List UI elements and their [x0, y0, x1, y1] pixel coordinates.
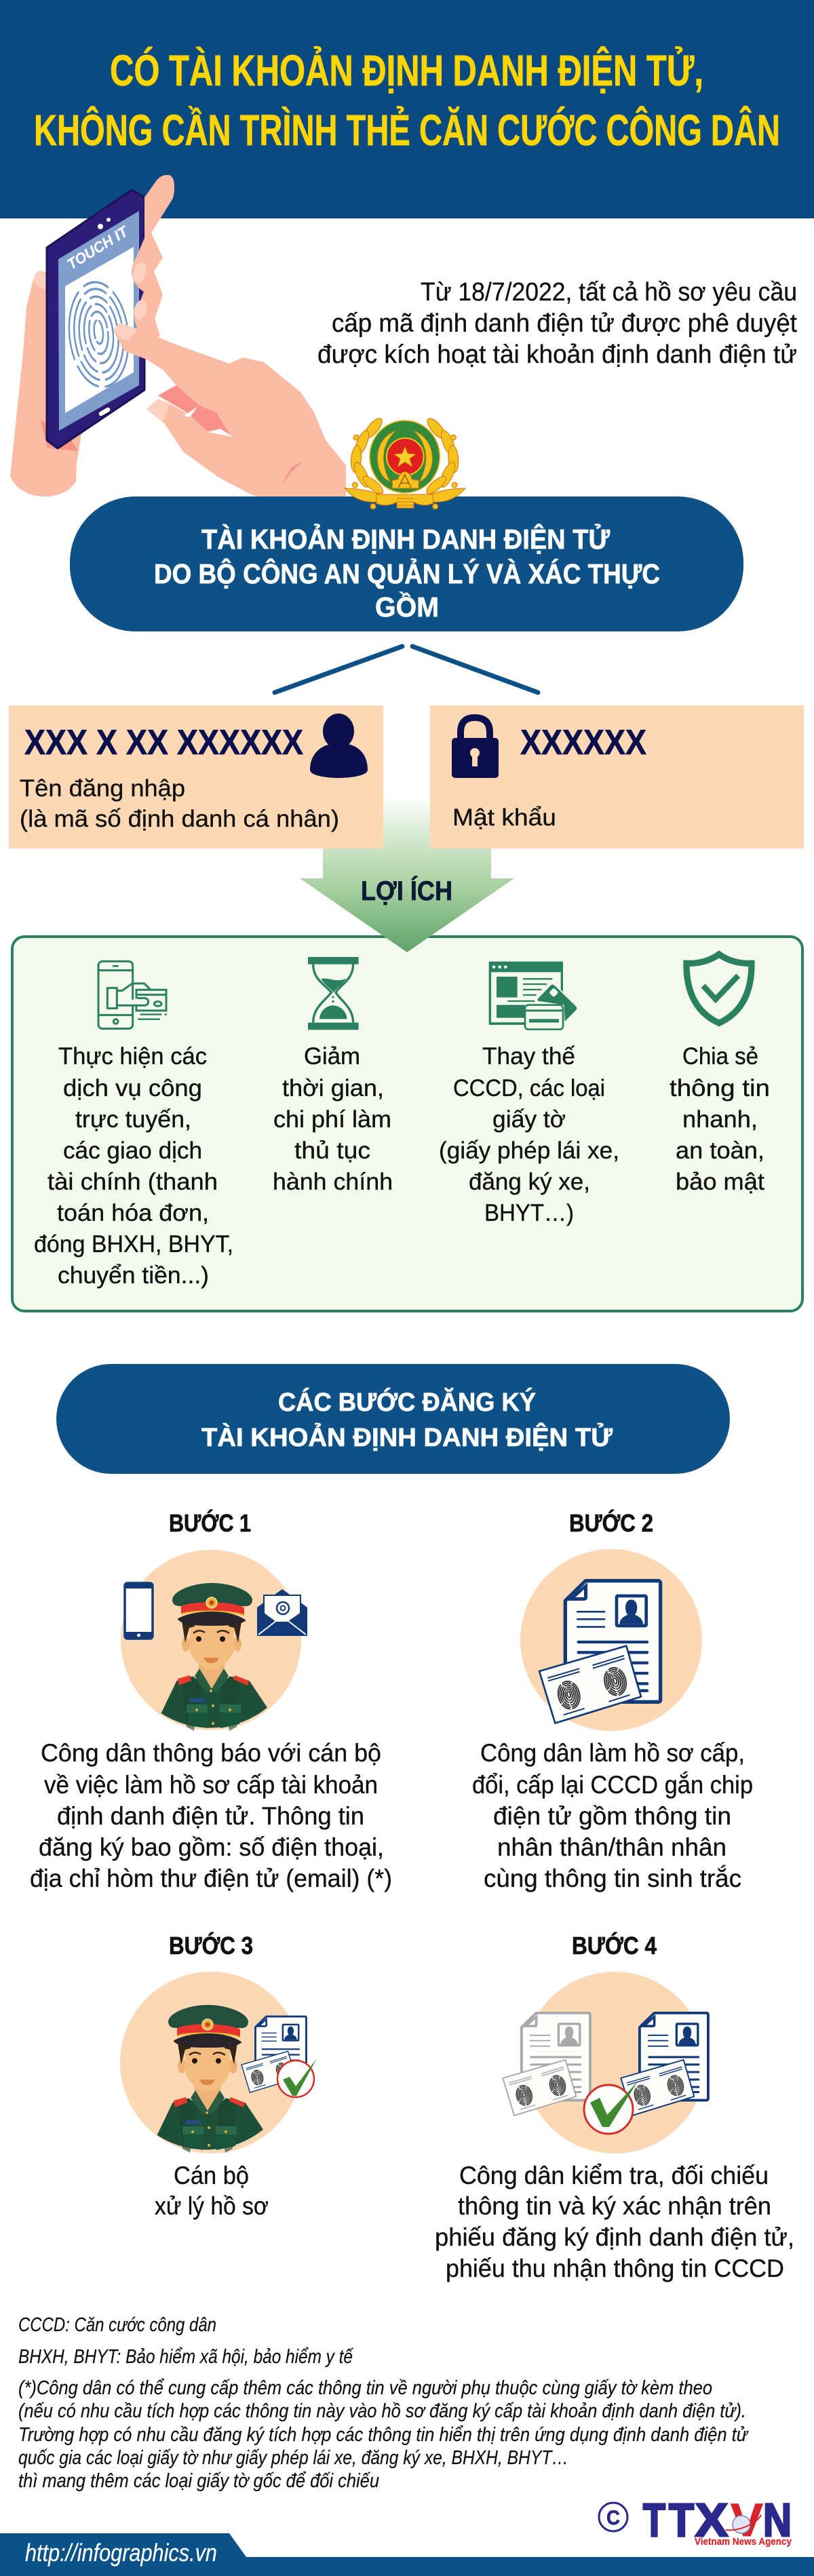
benefit 4 text: nhanh,	[682, 1106, 758, 1133]
benefit 3 text: Thay thế	[482, 1043, 575, 1070]
step 4 text: Công dân kiểm tra, đối chiếu	[459, 2162, 769, 2189]
pill: registration steps heading: CÁC BƯỚC ĐĂNG KÝ	[278, 1387, 536, 1417]
fingerprint on screen	[64, 279, 134, 390]
benefit 3 text: BHYT…)	[484, 1200, 574, 1226]
benefit 1 text: chuyển tiền...)	[58, 1262, 209, 1289]
icon: phone payment	[98, 961, 167, 1029]
illustration: profile and ID cards	[520, 1549, 702, 1731]
box: username: XXX X XX XXXXXX	[24, 723, 303, 762]
benefit 2 text: chi phí làm	[273, 1106, 391, 1133]
pointing hand	[113, 323, 346, 501]
notes: thì mang thêm các loại giấy tờ gốc để đối chiếu	[18, 2470, 379, 2492]
box: password: Mật khẩu	[452, 804, 556, 831]
step 3 text: xử lý hồ sơ	[155, 2192, 269, 2220]
notes: BHXH, BHYT: Bảo hiểm xã hội, bảo hiểm y tế	[18, 2346, 354, 2368]
notes: CCCD: Căn cước công dân	[18, 2314, 216, 2336]
logo: TTXVN: T	[643, 2494, 665, 2546]
step 3: BƯỚC 3	[169, 1931, 253, 1959]
header banner	[0, 0, 814, 218]
pill: account heading	[70, 496, 743, 631]
arrow: benefits	[300, 795, 514, 952]
pill: registration steps heading	[56, 1364, 730, 1474]
icon: police emblem	[345, 416, 465, 509]
pill: account heading: GỒM	[375, 591, 439, 623]
step 4 text	[435, 2162, 794, 2282]
benefit 4 text: bảo mật	[676, 1169, 764, 1195]
benefit 1 text: các giao dịch	[63, 1137, 202, 1164]
phone	[47, 190, 144, 448]
box: password	[430, 705, 804, 848]
benefit 4 text: thông tin	[670, 1075, 770, 1101]
benefit 1 text: đóng BHXH, BHYT,	[34, 1231, 233, 1257]
benefit 1 text: toán hóa đơn,	[57, 1200, 209, 1226]
box: password: XXXXXX	[520, 723, 646, 762]
pill: account heading: DO BỘ CÔNG AN QUẢN LÝ VÀ XÁC THỰC	[154, 558, 660, 589]
intro text	[317, 278, 797, 369]
step 1: BƯỚC 1	[169, 1508, 251, 1537]
pill: account heading: TÀI KHOẢN ĐỊNH DANH ĐIỆN TỬ	[201, 524, 610, 555]
step 1 text: địa chỉ hòm thư điện tử (email) (*)	[30, 1865, 392, 1892]
benefit 3 text: CCCD, các loại	[453, 1075, 605, 1101]
step 2 text	[472, 1739, 753, 1892]
step 2: BƯỚC 2	[569, 1508, 653, 1537]
logo: TTXVN: N	[763, 2494, 792, 2546]
footer band	[0, 2533, 814, 2576]
left holding hand	[10, 271, 81, 496]
benefit 1 text: trực tuyến,	[75, 1106, 191, 1133]
benefit 1 text: Thực hiện các	[58, 1043, 207, 1070]
logo: TTXVN: T	[669, 2494, 694, 2546]
box: username: (là mã số định danh cá nhân)	[20, 806, 339, 832]
step 1 text: Công dân thông báo với cán bộ	[41, 1739, 381, 1767]
illustration: compare documents	[503, 1972, 708, 2153]
box: username	[9, 705, 383, 848]
step 3 text	[155, 2162, 269, 2220]
step 4	[435, 1931, 794, 2282]
connector chevron	[275, 646, 538, 692]
logo: TTXVN: V	[731, 2494, 763, 2546]
step 4 text: thông tin và ký xác nhận trên	[458, 2192, 771, 2220]
step 2 text: Công dân làm hồ sơ cấp,	[480, 1739, 745, 1767]
benefit 4 text: Chia sẻ	[682, 1043, 758, 1070]
step 1 text	[30, 1739, 392, 1892]
step 3 text: Cán bộ	[174, 2162, 249, 2189]
step 2 text: đổi, cấp lại CCCD gắn chip	[472, 1771, 753, 1799]
step 3	[120, 1931, 317, 2220]
step 1 text: đăng ký bao gồm: số điện thoại,	[39, 1833, 384, 1861]
icon: documents and cards	[489, 962, 577, 1030]
logo: TTXVN: Vietnam News Agency	[695, 2536, 792, 2548]
notes	[18, 2314, 749, 2492]
step 2 text: nhân thân/thân nhân	[497, 1833, 726, 1861]
benefit 3 text: giấy tờ	[492, 1106, 566, 1133]
box: username: Tên đăng nhập	[20, 775, 185, 802]
benefit 2 text: thủ tục	[294, 1137, 370, 1164]
benefit 3 text	[439, 1043, 619, 1226]
benefit 1 text: dịch vụ công	[63, 1075, 202, 1101]
icon: hourglass	[308, 957, 359, 1030]
step 2	[472, 1508, 753, 1892]
benefit 3 text: đăng ký xe,	[469, 1169, 590, 1195]
step 2 text: điện tử gồm thông tin	[493, 1802, 731, 1830]
benefit 1 text	[34, 1043, 233, 1289]
benefit 2 text: Giảm	[304, 1043, 360, 1070]
notes: (*)Công dân có thể cung cấp thêm các thông tin về người phụ thuộc cùng giấy tờ kèm theo	[18, 2377, 712, 2399]
benefit 2 text	[273, 1043, 393, 1195]
footer band: http://infographics.vn	[25, 2539, 217, 2567]
intro text: Từ 18/7/2022, tất cả hồ sơ yêu cầu	[421, 278, 797, 307]
step 4 text: phiếu thu nhận thông tin CCCD	[446, 2255, 784, 2282]
screen label: TOUCH IT	[64, 222, 132, 273]
illustration: hands touching phone	[10, 175, 346, 501]
intro text: được kích hoạt tài khoản định danh điện tử	[317, 340, 797, 369]
intro text: cấp mã định danh điện tử được phê duyệt	[332, 309, 797, 338]
step 1 text: về việc làm hồ sơ cấp tài khoản	[44, 1771, 378, 1799]
benefit 2 text: thời gian,	[282, 1075, 384, 1101]
benefit 3 text: (giấy phép lái xe,	[439, 1137, 619, 1164]
step 1 text: định danh điện tử. Thông tin	[57, 1802, 364, 1830]
benefit 2 text: hành chính	[273, 1169, 393, 1195]
notes: quốc gia các loại giấy tờ như giấy phép lái xe, đăng ký xe, BHXH, BHYT…	[18, 2447, 568, 2469]
icon: lock	[452, 718, 499, 778]
panel: benefits	[12, 937, 802, 1311]
illustration: soldier with phone and email	[121, 1550, 307, 1731]
step 4 text: phiếu đăng ký định danh điện tử,	[435, 2223, 794, 2251]
pill: registration steps heading: TÀI KHOẢN ĐỊNH DANH ĐIỆN TỬ	[201, 1422, 613, 1452]
step 2 text: cùng thông tin sinh trắc	[484, 1865, 741, 1892]
icon: security shield	[686, 954, 752, 1023]
arrow: benefits: LỢI ÍCH	[361, 876, 452, 906]
benefit 4 text	[670, 1043, 770, 1195]
logo: TTXVN: C	[606, 2507, 620, 2529]
benefit 1 text: tài chính (thanh	[47, 1169, 218, 1195]
title	[34, 45, 780, 155]
step 4: BƯỚC 4	[572, 1931, 657, 1959]
icon: user	[310, 714, 368, 778]
benefit 4 text: an toàn,	[676, 1137, 764, 1164]
logo: TTXVN: X	[695, 2494, 728, 2546]
right fingers on phone	[131, 175, 174, 339]
illustration: officer processing documents	[120, 1972, 317, 2153]
step 1	[30, 1508, 392, 1892]
logo: TTXVN	[599, 2494, 792, 2548]
